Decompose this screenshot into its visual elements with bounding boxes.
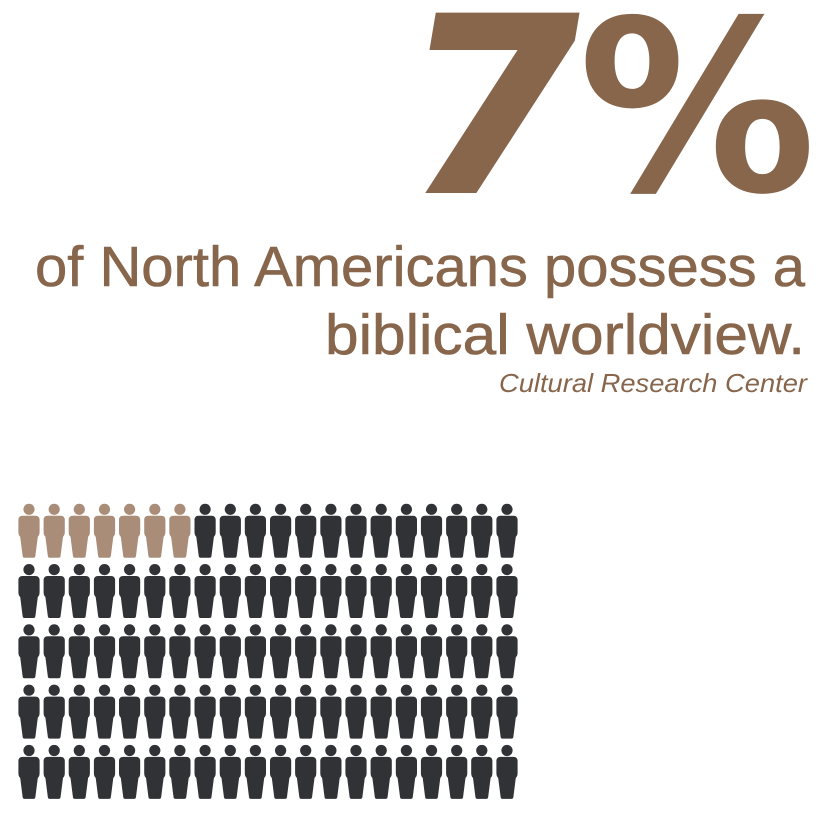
statement line 2: biblical worldview.: [325, 303, 805, 367]
row 2: [18, 564, 518, 618]
row 3: [18, 624, 518, 678]
statement line 1: of North Americans possess a: [35, 235, 805, 299]
row 4: [18, 685, 518, 739]
source credit: Cultural Research Center: [499, 368, 808, 398]
headline statistic: 7%: [381, 0, 816, 248]
row 5: [18, 745, 518, 799]
row 1: 7 highlighted people then 13 dark: [18, 504, 518, 558]
statement text: [35, 235, 805, 367]
pictogram: 100 people, 7 highlighted: [18, 504, 518, 799]
